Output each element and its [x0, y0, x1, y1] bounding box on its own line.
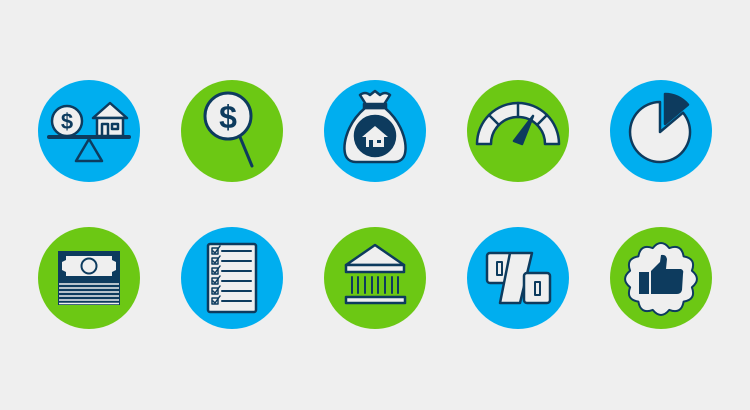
icon: money bag with house: [324, 80, 426, 182]
icon: percent: [467, 227, 569, 329]
icon: thumbs up badge: [610, 227, 712, 329]
icon: balance dollar vs house: $: [61, 109, 73, 134]
icon: bank: [324, 227, 426, 329]
icon: cash stack: [38, 227, 140, 329]
icon: checklist: [181, 227, 283, 329]
icon: magnifier dollar: $: [219, 99, 237, 135]
icon: pie chart: [610, 80, 712, 182]
icon: balance dollar vs house: [38, 80, 140, 182]
icon: magnifier dollar: [181, 80, 283, 182]
icon: gauge: [467, 80, 569, 182]
